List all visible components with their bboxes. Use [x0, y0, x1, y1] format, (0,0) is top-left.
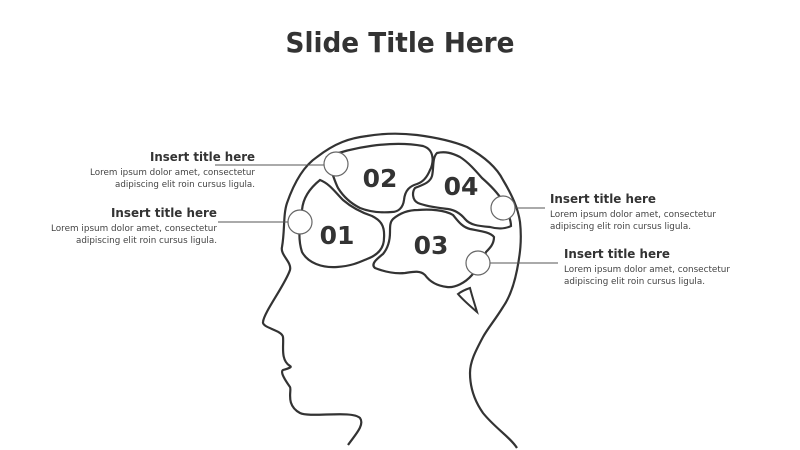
number 03: 03	[414, 231, 448, 260]
text block 1 (left top)	[90, 149, 255, 190]
lobe 02	[327, 144, 433, 212]
text block 1 (left top): Lorem ipsum dolor amet, consectetur	[90, 168, 255, 178]
text block 2 (left bottom): adipiscing elit roin cursus ligula.	[76, 236, 217, 246]
lobe 03	[373, 210, 494, 287]
title: Slide Title Here	[286, 26, 514, 59]
number 04: 04	[444, 172, 478, 201]
text block 4 (right bottom): Insert title here	[564, 246, 670, 261]
text block 1 (left top): adipiscing elit roin cursus ligula.	[115, 180, 255, 190]
text block 4 (right bottom): adipiscing elit roin cursus ligula.	[564, 277, 705, 287]
text block 2 (left bottom): Lorem ipsum dolor amet, consectetur	[51, 224, 217, 234]
text block 3 (right top): Insert title here	[550, 191, 656, 206]
lobe 01	[299, 180, 384, 267]
text block 3 (right top): Lorem ipsum dolor amet, consectetur	[550, 210, 716, 220]
text block 1 (left top): Insert title here	[150, 149, 255, 164]
text block 3 (right top): adipiscing elit roin cursus ligula.	[550, 222, 691, 232]
text block 4 (right bottom)	[564, 246, 730, 287]
head outline	[263, 134, 521, 448]
number 02: 02	[363, 164, 397, 193]
small lobe triangle	[458, 288, 477, 312]
text block 2 (left bottom)	[51, 205, 217, 246]
text block 2 (left bottom): Insert title here	[111, 205, 217, 220]
number 01: 01	[320, 221, 354, 250]
lobe 04	[413, 152, 511, 228]
text block 3 (right top)	[550, 191, 716, 232]
marker circles	[288, 152, 515, 275]
connector lines	[215, 165, 558, 263]
text block 4 (right bottom): Lorem ipsum dolor amet, consectetur	[564, 265, 730, 275]
